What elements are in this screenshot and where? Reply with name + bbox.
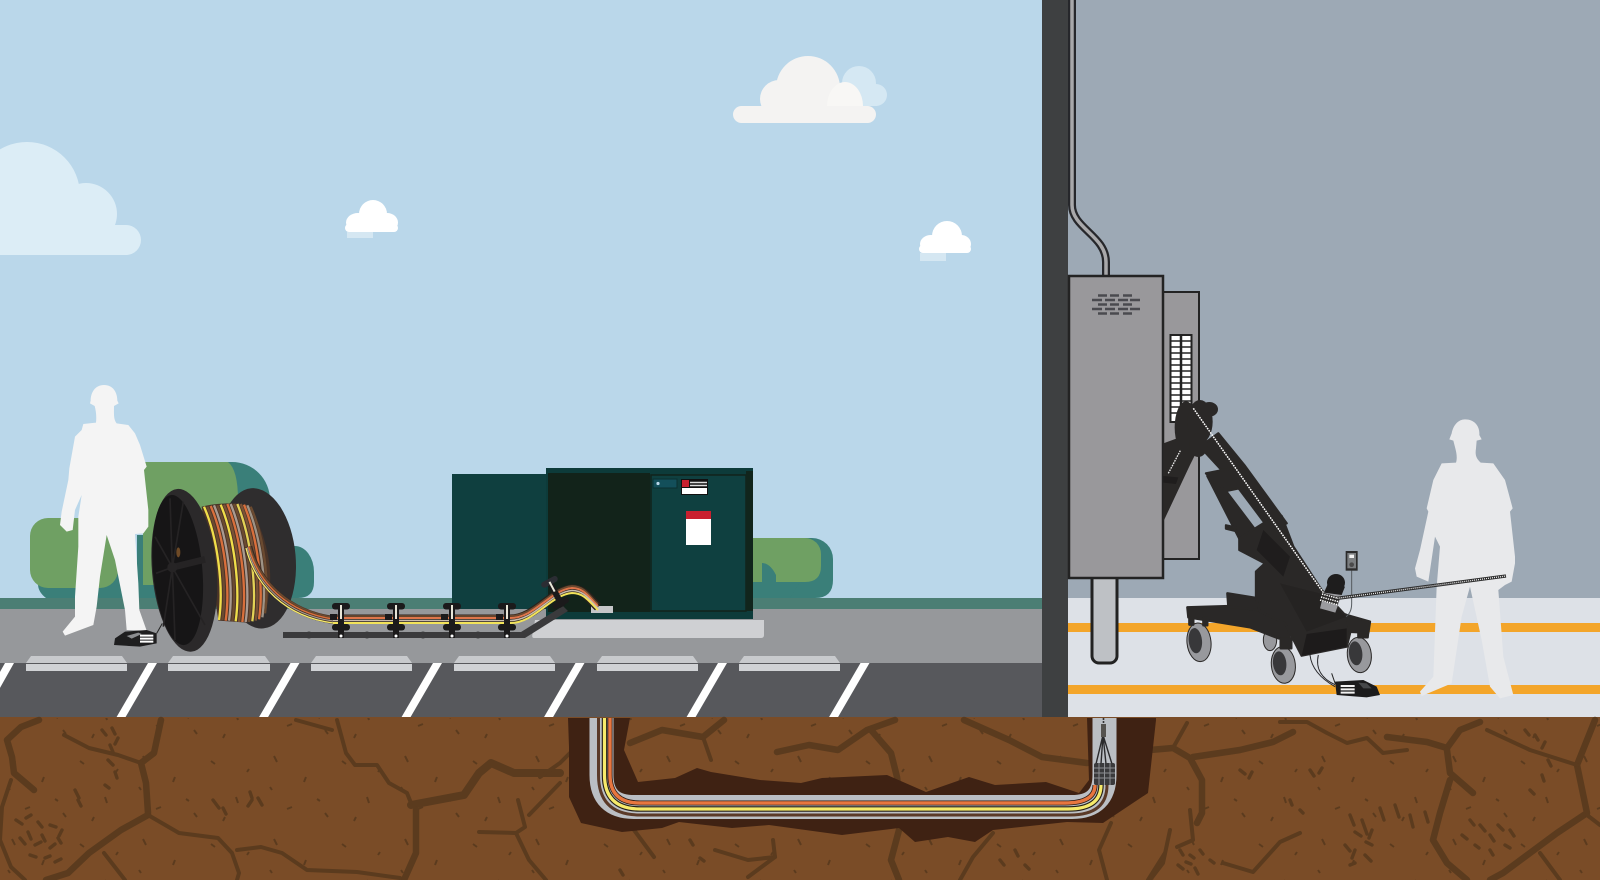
worker silhouette: left: [60, 385, 148, 636]
status light: [656, 482, 660, 485]
control wires: [1310, 655, 1335, 687]
small status label: [653, 479, 677, 488]
reel cable windings: [204, 504, 266, 622]
machine detail shading: [1257, 530, 1290, 577]
cloud: small left: [345, 200, 398, 238]
conduit to panel: [1072, 0, 1106, 276]
concrete pad: [532, 620, 764, 638]
base rail: [283, 606, 568, 638]
remote control unit: right: [1332, 673, 1380, 697]
sky background: [0, 0, 1042, 600]
soil: [0, 717, 1600, 880]
cable tugger machine: [1163, 400, 1373, 687]
lower boom member: [1207, 476, 1257, 540]
reel drum base: [202, 503, 270, 623]
building wall section: [1042, 0, 1068, 718]
reel hub: [167, 562, 177, 572]
cabinet body: [546, 468, 753, 619]
rail rollers: [306, 632, 482, 638]
boom mid block: [1206, 466, 1247, 491]
curb stops: [26, 656, 840, 671]
worker silhouette: right: [1415, 419, 1515, 698]
sidewalk: [0, 609, 1042, 663]
boom handle: [1226, 525, 1238, 531]
upper boom member: [1200, 433, 1287, 530]
soil cracks: [0, 720, 1600, 880]
horizontal cable run: [333, 586, 598, 623]
cabinet interior: [548, 473, 650, 612]
horizon grass strip: [0, 598, 1042, 609]
base frame: [1187, 606, 1290, 640]
floor safety stripes: [1068, 623, 1600, 694]
right wheel: [1346, 636, 1373, 674]
breaker grid: [1170, 335, 1192, 422]
cable stand 1: [330, 603, 350, 638]
cable stand 3: [441, 603, 461, 638]
remote control unit: left: [114, 623, 162, 647]
warning label: [681, 479, 708, 495]
pulling rope on boom: [1193, 408, 1325, 595]
feed rope held by worker: [1337, 576, 1506, 598]
reel hub glow: [176, 547, 180, 557]
excavated cavity around conduit: [568, 718, 1156, 842]
soil crumble clusters: [16, 728, 1551, 875]
reel face: [147, 493, 209, 647]
panel vent slots: [1092, 296, 1140, 314]
reel front flange: [145, 486, 224, 655]
soil speckle texture: [0, 718, 1600, 880]
cables in conduit: [598, 718, 1107, 815]
motor housing: [1239, 516, 1350, 656]
bush: left: [30, 462, 314, 598]
cable pulling grips: [1094, 718, 1115, 785]
rear wheel far: [1263, 629, 1277, 651]
cable stand 2: [385, 603, 405, 638]
track stack: [1227, 593, 1260, 610]
right frame arm: [1317, 603, 1370, 633]
gray junction block: [591, 606, 613, 613]
top sheave head: [1175, 400, 1218, 457]
panel support pole: [1092, 570, 1117, 663]
caster forks: [1189, 617, 1369, 648]
road: [0, 663, 1042, 718]
open cabinet door: [452, 474, 549, 609]
main electrical panel: [1069, 276, 1163, 578]
indoor wall: [1068, 0, 1600, 598]
lower box panel: [1302, 628, 1347, 656]
wall power switch box: [1346, 551, 1358, 617]
green utility cabinet: [452, 468, 753, 619]
cabinet side panel: [651, 475, 746, 611]
front box panel: [1280, 583, 1347, 632]
notice sheet: [686, 511, 711, 545]
cable leaving reel: [246, 546, 333, 623]
reel back flange: [213, 485, 302, 632]
reel spokes: [155, 498, 205, 640]
cable stand 5 angled: [540, 575, 571, 611]
machine body: [1187, 433, 1370, 656]
secondary electrical panel: [1163, 292, 1199, 559]
indoor floor: [1068, 598, 1600, 718]
front wheel: [1269, 646, 1297, 684]
parking stripes: [0, 663, 870, 718]
underground conduit: [598, 718, 1107, 815]
cloud: small right: [919, 221, 971, 261]
cloud: large left: [0, 142, 141, 255]
cable stand 4: [496, 603, 516, 638]
capstan drum: [1320, 574, 1345, 613]
cable reel and feed: [145, 485, 333, 655]
cabinet right edge: [746, 471, 753, 611]
cloud: top centre: [733, 56, 887, 123]
rear support legs: [1163, 437, 1197, 522]
rear wheel: [1185, 622, 1213, 663]
bush: right: [753, 538, 833, 598]
